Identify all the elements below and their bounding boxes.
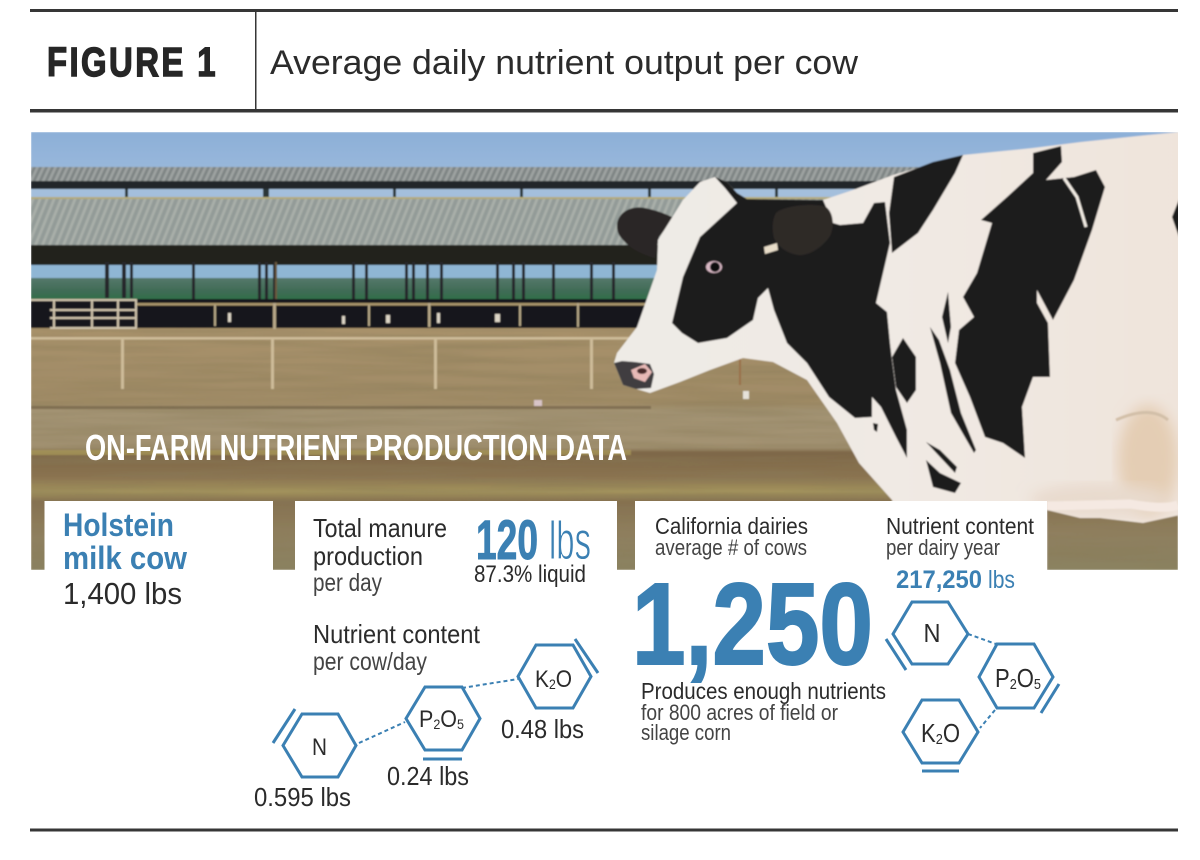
big number: 1,250: 1,250	[632, 559, 873, 689]
cow	[614, 132, 1180, 570]
cow shading	[1030, 405, 1178, 516]
barn pen wall	[31, 298, 648, 330]
hexagon: P2O5 per cow: P	[419, 706, 435, 733]
molecule connectors	[359, 679, 518, 743]
hexagon: K2O per cow	[518, 639, 598, 708]
text: for 800 acres: for 800 acres of field or	[641, 700, 838, 725]
title: figure number: FIGURE 1	[47, 39, 218, 85]
bottom rule	[30, 828, 1178, 832]
hexagon: K2O per cow: O	[556, 666, 572, 693]
heading: milk cow: milk cow	[63, 540, 187, 576]
hexagon: K2O per dairy	[903, 700, 978, 771]
value: P2O5: 0.24 lbs	[387, 761, 469, 791]
text: silage corn: silage corn	[641, 720, 731, 745]
subheading: average cows: average # of cows	[655, 535, 807, 560]
panel: total manure production	[313, 508, 591, 597]
hexagon: N per cow	[273, 709, 356, 777]
cattle gate	[31, 299, 136, 329]
label: total manure: Total manure	[313, 513, 447, 543]
value: K2O: 0.48 lbs	[501, 714, 584, 744]
heading: nutrient content: Nutrient content	[313, 619, 481, 649]
value: N: 0.595 lbs	[254, 782, 351, 812]
label: per day: per day	[313, 569, 382, 597]
hexagon: K2O per cow: 2	[549, 676, 556, 692]
cow ear front	[773, 205, 833, 255]
cow ear tag	[764, 243, 778, 254]
hexagon: P2O5 per dairy: O	[1017, 663, 1034, 693]
horizon sky and tree line	[31, 264, 658, 300]
ground	[31, 325, 1178, 570]
photo headline: ON-FARM NUTRIENT PRODUCTION DATA	[85, 427, 627, 468]
text: produces enough nutrients: Produces enough nutrients	[641, 678, 886, 704]
heading: nutrient content: Nutrient content	[886, 513, 1035, 539]
unit: lbs: lbs	[549, 511, 591, 571]
hexagon: P2O5 per cow: 5	[457, 716, 464, 732]
panel: Holstein milk cow	[63, 507, 187, 611]
hexagon: K2O per cow: K	[535, 666, 551, 693]
far barn roof	[31, 167, 931, 197]
panel: nutrient content per dairy year	[886, 513, 1059, 771]
hexagon: P2O5 per dairy: 2	[1010, 676, 1017, 693]
photo: dairy barn and ground with cow	[31, 132, 1180, 570]
hexagon: P2O5 per cow	[406, 687, 480, 759]
hexagon: P2O5 per dairy: 5	[1034, 676, 1041, 693]
hexagon: K2O per dairy: O	[943, 718, 960, 748]
hexagon: N per dairy	[886, 602, 968, 670]
ground details	[31, 391, 749, 455]
hexagon: P2O5 per cow: 2	[433, 716, 440, 732]
hexagon: P2O5 per dairy: P	[995, 663, 1012, 693]
panel: nutrient content per cow per day	[254, 619, 598, 812]
hexagon: N per cow: N	[312, 734, 327, 761]
near barn roof	[31, 197, 831, 265]
value: 217,250: 217,250	[896, 566, 982, 594]
hexagon: P2O5 per dairy	[979, 644, 1059, 713]
heading: breed: Holstein	[63, 507, 174, 543]
hexagon: P2O5 per cow: O	[440, 706, 457, 733]
title: figure description: Average daily nutrient output per cow	[270, 44, 858, 82]
cow white stripe in shoulder	[1064, 178, 1086, 227]
label: production: production	[313, 541, 423, 571]
cow muzzle	[614, 361, 654, 389]
molecule connectors	[968, 634, 996, 728]
cow weight: 1,400 lbs	[63, 576, 182, 611]
pasture fence	[31, 337, 751, 389]
subheading: per cow/day: per cow/day	[313, 648, 427, 676]
cow black markings	[672, 146, 1180, 493]
barn posts	[104, 261, 616, 300]
hexagon: K2O per dairy: K	[921, 718, 938, 748]
cow body	[614, 132, 1180, 570]
cow ear	[617, 207, 674, 258]
white bottom area and panel tabs	[0, 501, 1200, 828]
panel: California dairies	[632, 513, 886, 745]
header rules	[30, 9, 1178, 112]
hexagon: K2O per dairy: 2	[936, 731, 943, 748]
heading: California dairies: California dairies	[655, 513, 808, 539]
subheading: per dairy year: per dairy year	[886, 535, 1000, 560]
value: liquid share: 87.3% liquid	[474, 561, 586, 588]
unit: lbs: lbs	[988, 566, 1015, 594]
cow eye	[706, 261, 722, 273]
value: 120: 120	[476, 508, 538, 571]
hexagon: N per dairy: N	[924, 618, 940, 648]
